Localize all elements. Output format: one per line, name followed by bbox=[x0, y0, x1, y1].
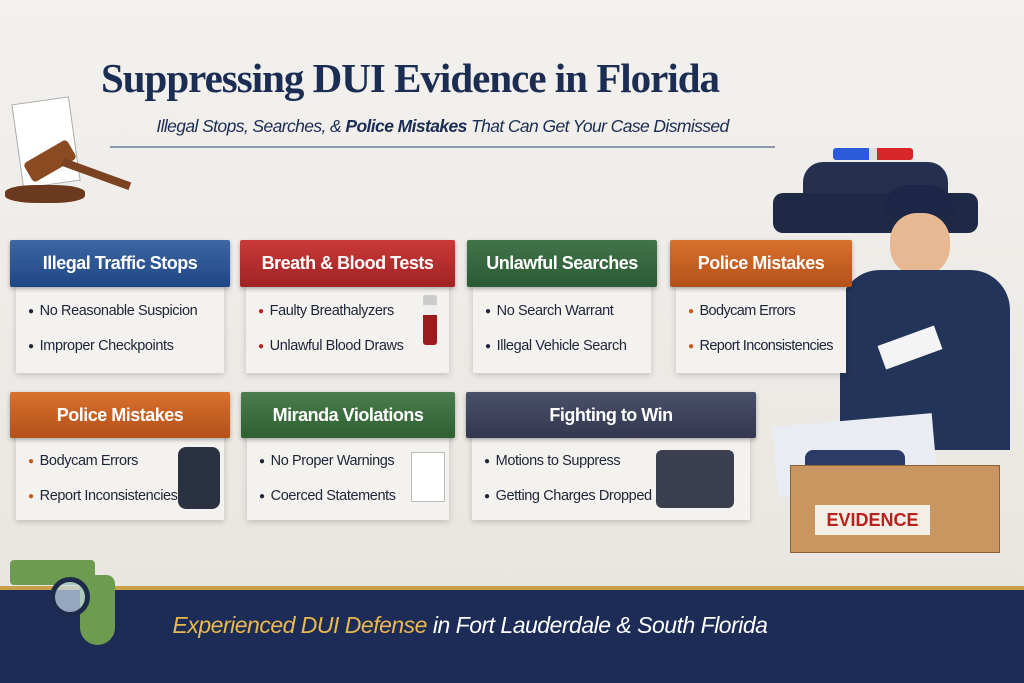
footer banner bbox=[0, 586, 1024, 683]
icon: blood vials bbox=[423, 295, 437, 345]
card: Police Mistakes (bottom): Police Mistakes bbox=[57, 404, 183, 424]
card: Unlawful Searches: Unlawful Searches bbox=[486, 253, 638, 273]
footer banner: Experienced DUI Defense in Fort Lauderdale & South Florida bbox=[173, 612, 767, 638]
card: Miranda Violations bbox=[238, 392, 458, 524]
icon: bodycam bbox=[178, 447, 220, 509]
icon: gavel and documents bbox=[5, 96, 132, 203]
illustration: police officer bbox=[840, 185, 1010, 450]
illustration: police car bbox=[773, 148, 978, 233]
card: Police Mistakes (bottom): ● Report Inconsistencies bbox=[28, 488, 178, 504]
card: Unlawful Searches: ● No Search Warrant bbox=[485, 303, 613, 319]
icon: Florida map with magnifier bbox=[10, 560, 115, 645]
card: Breath & Blood Tests bbox=[238, 240, 458, 378]
subtitle: Illegal Stops, Searches, & Police Mistakes That Can Get Your Case Dismissed bbox=[156, 116, 729, 136]
card: Breath & Blood Tests: Breath & Blood Tests bbox=[262, 253, 433, 273]
card: Miranda Violations: Miranda Violations bbox=[273, 404, 423, 424]
card: Fighting to Win: ● Motions to Suppress bbox=[484, 453, 620, 469]
icon: document with pin bbox=[411, 452, 445, 502]
title: Suppressing DUI Evidence in Florida bbox=[101, 55, 719, 101]
illustration: evidence box: EVIDENCE bbox=[826, 510, 919, 530]
card: Fighting to Win bbox=[464, 392, 758, 524]
card: Police Mistakes (bottom) bbox=[8, 392, 232, 524]
illustration: evidence box bbox=[772, 413, 1000, 553]
card: Breath & Blood Tests: ● Faulty Breathalyzers bbox=[258, 303, 394, 319]
card: Police Mistakes (top): ● Bodycam Errors bbox=[688, 303, 795, 319]
card: Illegal Traffic Stops: ● Improper Checkpoints bbox=[28, 338, 173, 354]
card: Illegal Traffic Stops: Illegal Traffic Stops bbox=[43, 253, 197, 273]
card: Illegal Traffic Stops: ● No Reasonable Suspicion bbox=[28, 303, 197, 319]
card: Fighting to Win: Fighting to Win bbox=[549, 404, 673, 424]
card: Police Mistakes (bottom): ● Bodycam Errors bbox=[28, 453, 138, 469]
card: Illegal Traffic Stops bbox=[8, 240, 232, 378]
card: Fighting to Win: ● Getting Charges Dropped bbox=[484, 488, 652, 504]
icon: gun and papers bbox=[656, 450, 734, 508]
card: Miranda Violations: ● Coerced Statements bbox=[259, 488, 396, 504]
card: Police Mistakes (top): Police Mistakes bbox=[698, 253, 824, 273]
card: Police Mistakes (top): ● Report Inconsistencies bbox=[688, 338, 833, 354]
card: Police Mistakes (top) bbox=[668, 240, 854, 378]
card: Unlawful Searches bbox=[464, 240, 660, 378]
card: Breath & Blood Tests: ● Unlawful Blood Draws bbox=[258, 338, 403, 354]
card: Unlawful Searches: ● Illegal Vehicle Search bbox=[485, 338, 626, 354]
card: Miranda Violations: ● No Proper Warnings bbox=[259, 453, 394, 469]
